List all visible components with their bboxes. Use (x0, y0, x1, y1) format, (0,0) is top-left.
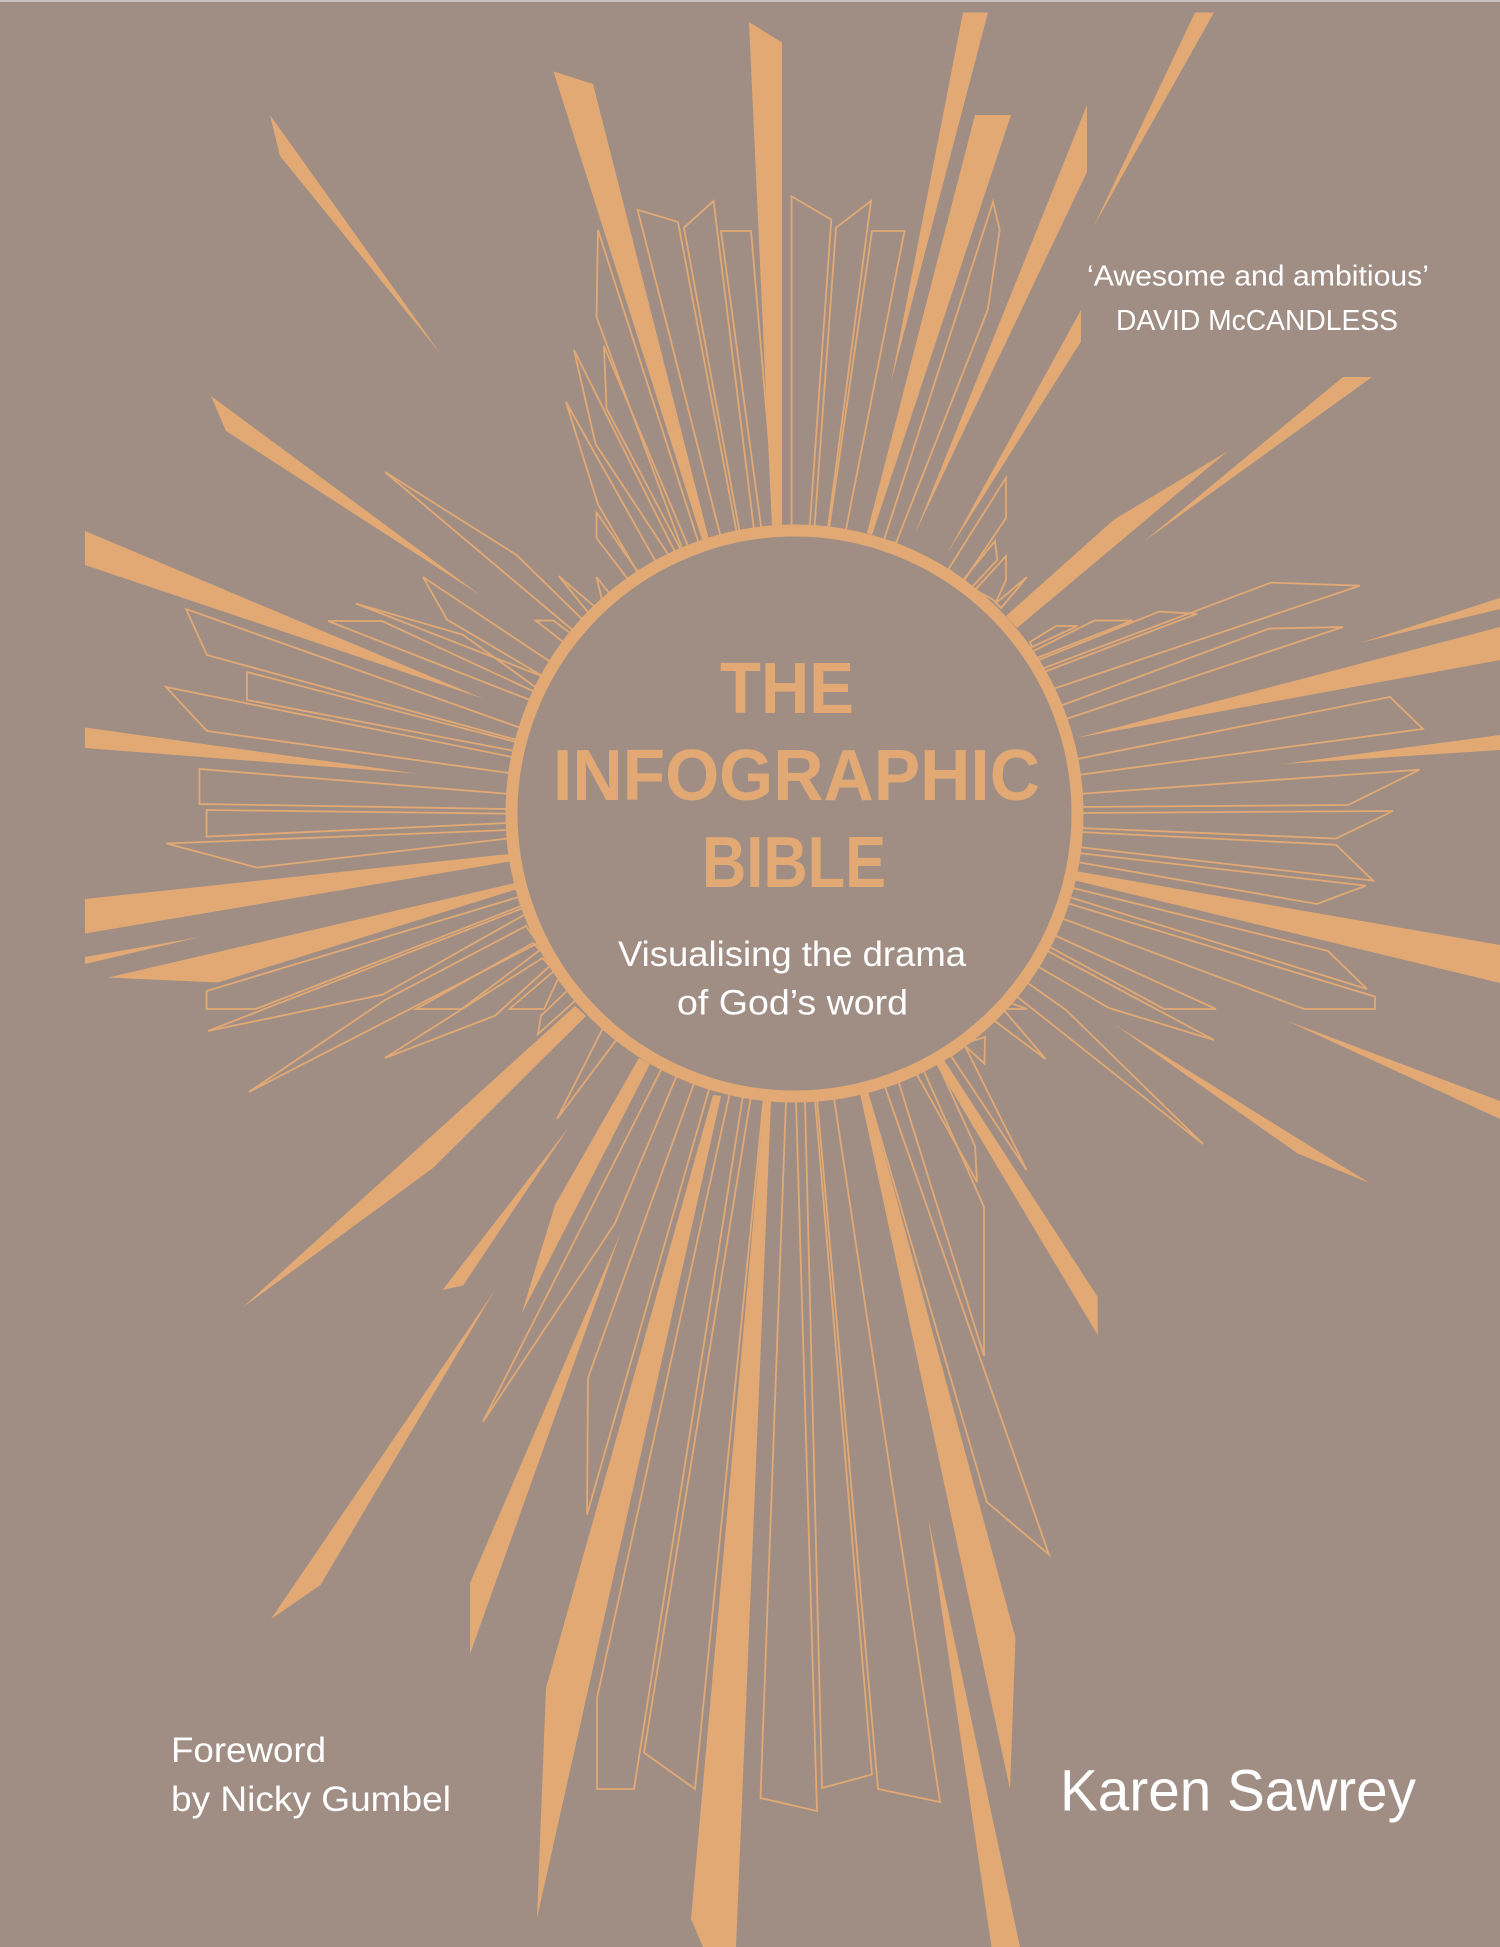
quote attribution: DAVID McCANDLESS (1116, 305, 1398, 337)
title: INFOGRAPHIC: INFOGRAPHIC (553, 736, 1040, 816)
subtitle line one: Visualising the drama (618, 935, 967, 974)
foreword line one: Foreword (171, 1731, 326, 1770)
title: BIBLE: BIBLE (702, 823, 886, 903)
central circle (512, 530, 1078, 1096)
sunburst: outline rays (166, 196, 1423, 1811)
subtitle line two: of God’s word (677, 984, 908, 1022)
quote: ‘Awesome and ambitious’ (1087, 260, 1429, 292)
foreword line two: by Nicky Gumbel (171, 1780, 451, 1819)
title: THE: THE (720, 649, 854, 729)
author name: Karen Sawrey (1060, 1758, 1416, 1824)
